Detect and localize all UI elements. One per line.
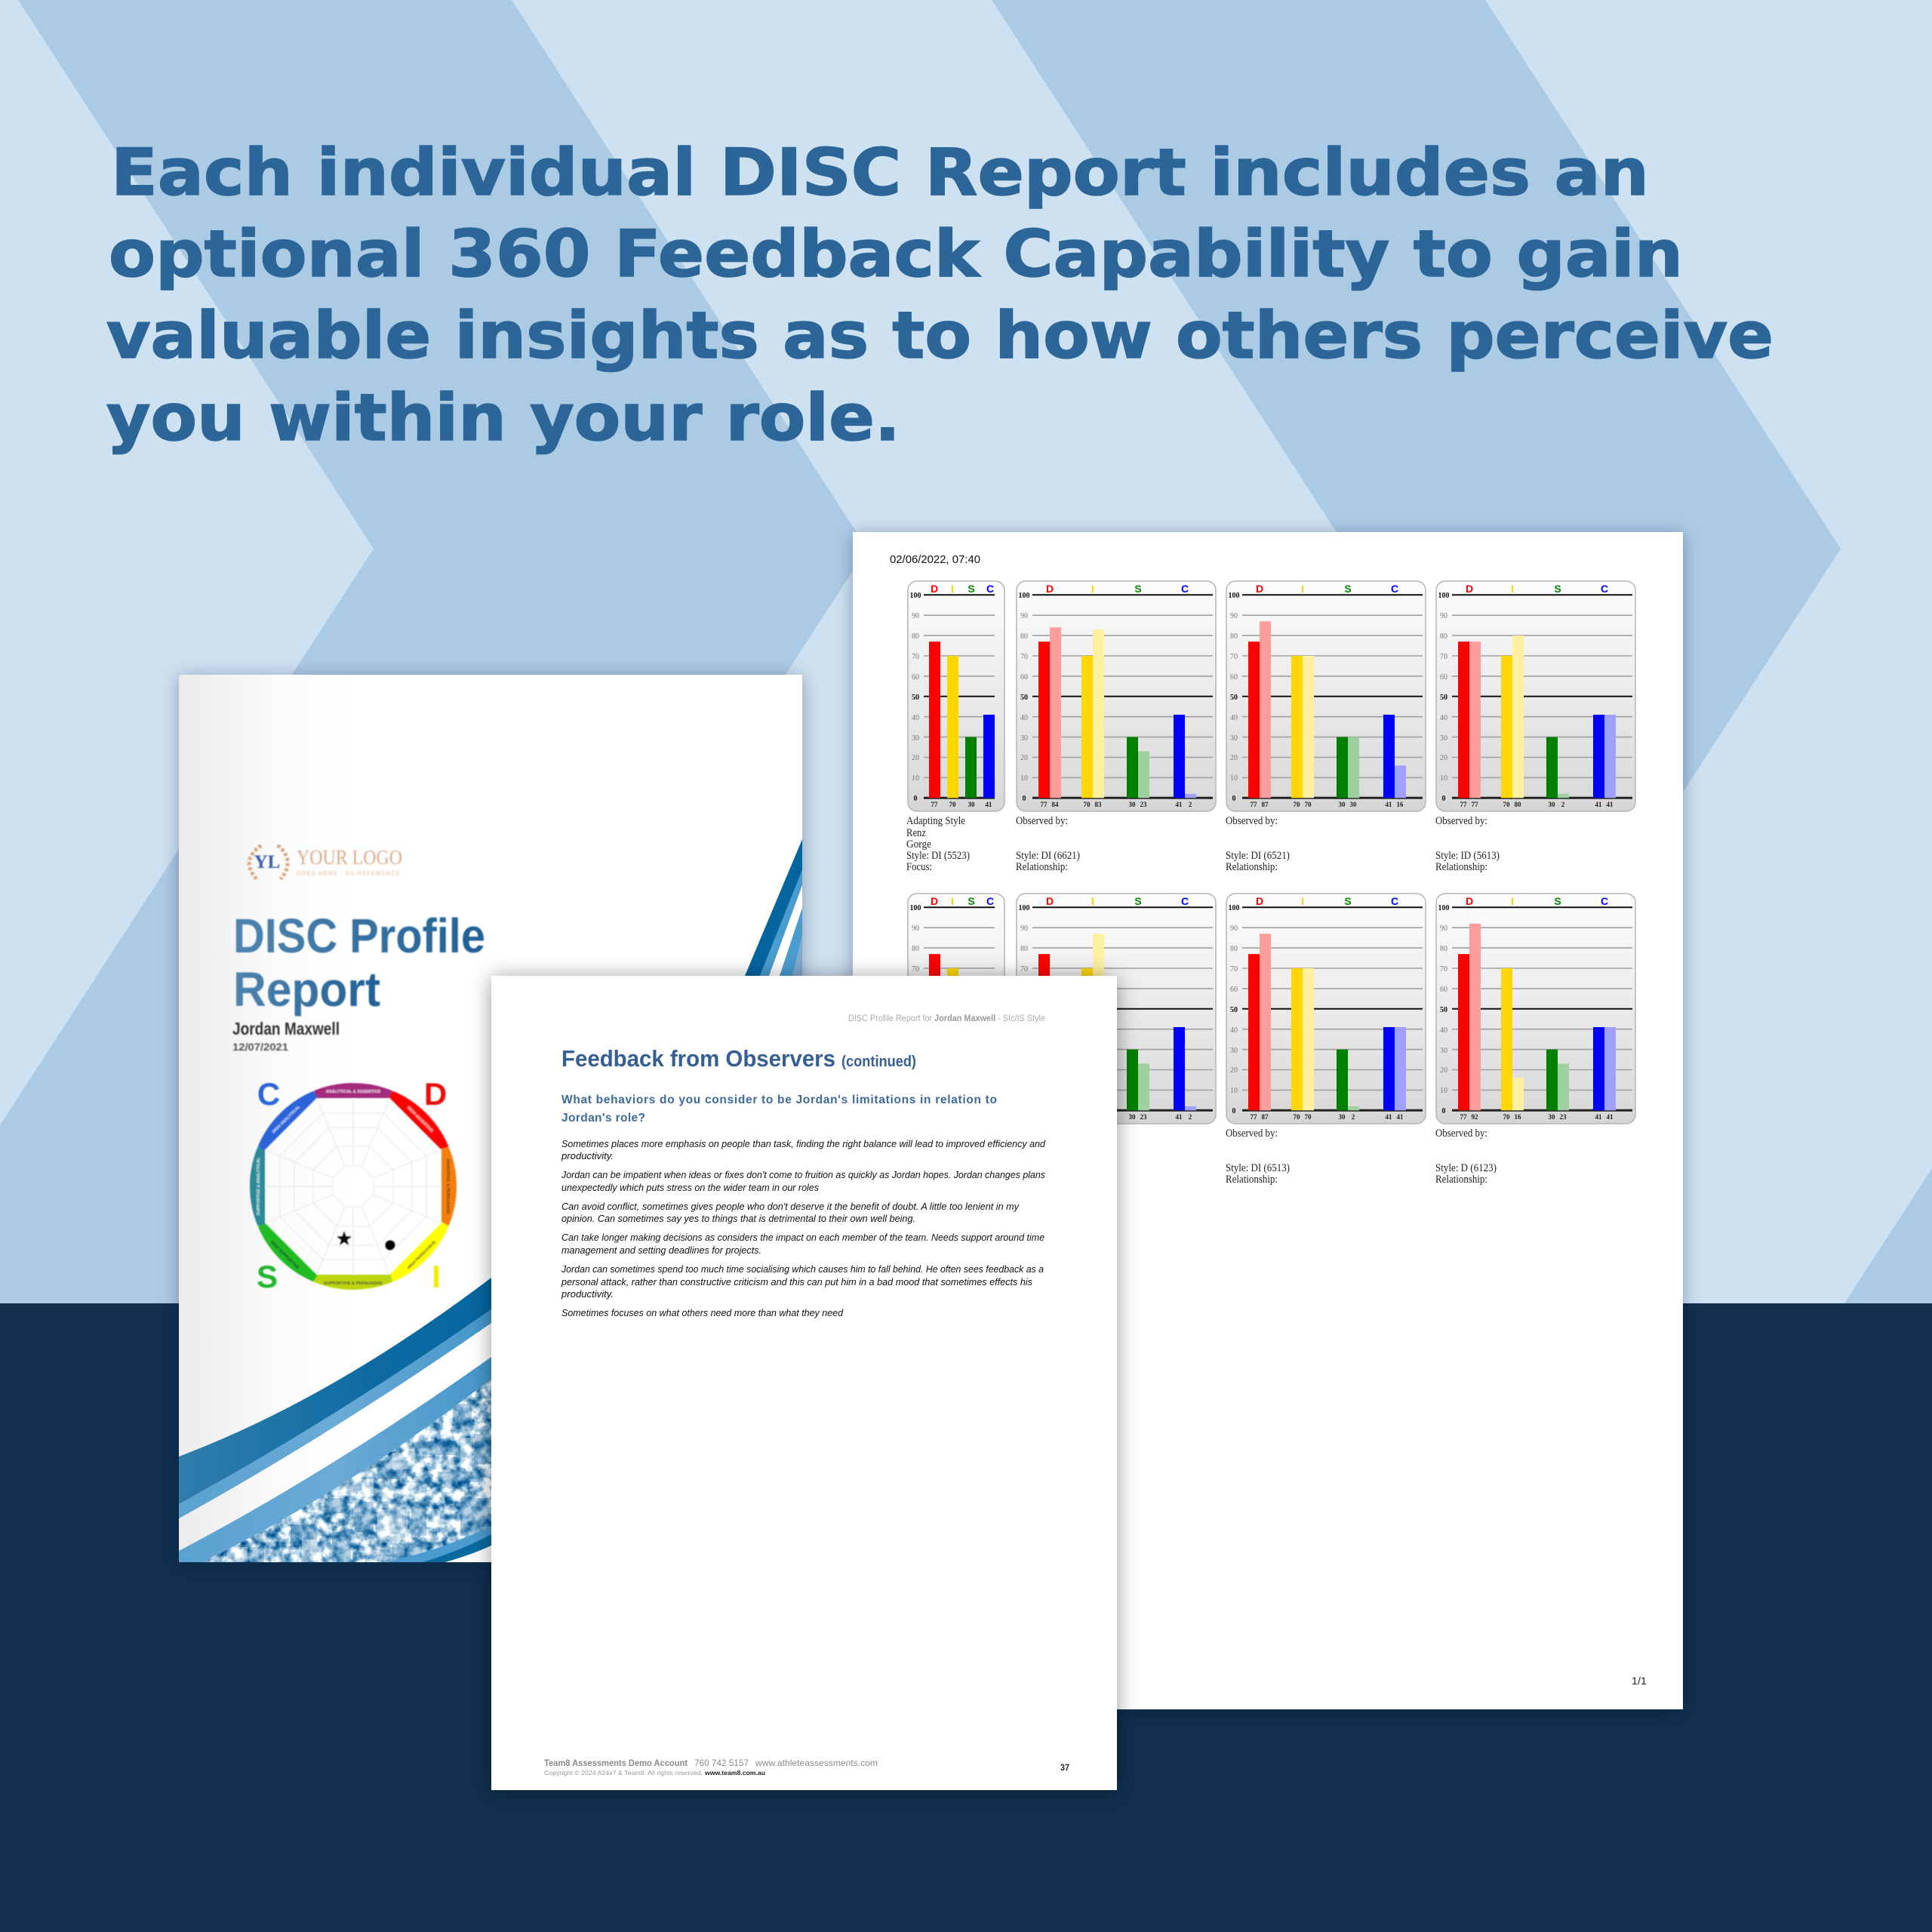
chart captions row 1: Relationship: bbox=[1016, 861, 1068, 873]
chart: observer 3 row 1: 40 bbox=[1440, 714, 1447, 722]
title bbox=[106, 135, 1774, 456]
booklet logo: YOUR LOGO bbox=[297, 846, 402, 869]
chart: observer 2 row 1 bbox=[1226, 581, 1426, 811]
chart: observer 1 row 2: 70 bbox=[1020, 965, 1028, 974]
chart: observer 3 row 2 bbox=[1436, 894, 1635, 1124]
chart: observer 1 row 1: 23 bbox=[1140, 801, 1147, 808]
chart: observer 3 row 2: 50 bbox=[1440, 1006, 1447, 1014]
chart: observer 1 row 1: 83 bbox=[1094, 801, 1102, 808]
chart captions row 1: Observed by: bbox=[1016, 815, 1068, 827]
chart: observer 3 row 1: 70 bbox=[1440, 653, 1447, 661]
chart: observer 2 row 1: 41 bbox=[1386, 801, 1392, 808]
chart: observer 2 row 1: 90 bbox=[1230, 612, 1238, 620]
chart: observer 3 row 2: 70 bbox=[1503, 1113, 1510, 1121]
chart captions row 1: Relationship: bbox=[1226, 861, 1278, 873]
chart: observer 2 row 2: 60 bbox=[1230, 986, 1238, 994]
chart: observer 2 row 2: 100 bbox=[1229, 904, 1239, 912]
chart: observer 3 row 1: 80 bbox=[1514, 801, 1521, 808]
wheel ring labels bbox=[257, 1090, 450, 1286]
chart: observer 1 row 2: 2 bbox=[1189, 1113, 1192, 1121]
chart: adapting style row 1: 0 bbox=[913, 795, 918, 803]
chart: observer 3 row 2: 60 bbox=[1440, 986, 1447, 994]
chart: adapting style row 1: 90 bbox=[912, 612, 919, 620]
chart: adapting style row 1: 20 bbox=[912, 754, 919, 762]
chart: adapting style row 1: 10 bbox=[912, 774, 919, 783]
chart: observer 2 row 2: 50 bbox=[1230, 1006, 1238, 1014]
feedback comments: management and setting deadlines for projects. bbox=[561, 1244, 761, 1256]
chart: adapting style row 1: 70 bbox=[949, 801, 956, 808]
chart: observer 2 row 1: S bbox=[1344, 583, 1352, 595]
chart: observer 3 row 2: D bbox=[1466, 895, 1473, 907]
chart: observer 1 row 1: S bbox=[1134, 583, 1142, 595]
chart captions row 2: Style: D (6123) bbox=[1435, 1162, 1497, 1174]
chart: observer 2 row 2: 41 bbox=[1396, 1113, 1404, 1121]
title: Each individual DISC Report includes an bbox=[111, 135, 1649, 211]
chart: observer 3 row 2: 90 bbox=[1440, 924, 1447, 933]
chart: observer 2 row 2: 20 bbox=[1230, 1066, 1238, 1075]
page footer: www.team8.com.au bbox=[704, 1769, 765, 1777]
chart: observer 3 row 1: S bbox=[1554, 583, 1561, 595]
chart: observer 3 row 2: 0 bbox=[1441, 1107, 1446, 1115]
chart captions row 1: Style: ID (5613) bbox=[1435, 850, 1500, 862]
chart: observer 2 row 1: 16 bbox=[1396, 801, 1404, 808]
wheel ring labels: HIGH SUPPORTIVE bbox=[269, 1240, 300, 1271]
chart: observer 1 row 1: D bbox=[1046, 583, 1054, 595]
chart: observer 2 row 1: 87 bbox=[1262, 801, 1269, 808]
wheel corner letters: D bbox=[424, 1076, 447, 1112]
chart: observer 3 row 1: 2 bbox=[1561, 801, 1565, 808]
chart: observer 1 row 1: 10 bbox=[1020, 774, 1028, 783]
chart: observer 1 row 1: 77 bbox=[1040, 801, 1048, 808]
chart: adapting style row 1 bbox=[908, 581, 1004, 811]
chart: observer 2 row 2: 87 bbox=[1262, 1113, 1269, 1121]
chart: observer 1 row 1: 2 bbox=[1189, 801, 1192, 808]
chart captions row 1: Relationship: bbox=[1435, 861, 1487, 873]
chart: observer 3 row 2: 77 bbox=[1460, 1113, 1467, 1121]
wheel ring labels: HIGH ANALYTICAL bbox=[272, 1104, 302, 1134]
chart: observer 3 row 2: 10 bbox=[1440, 1087, 1447, 1095]
chart: observer 3 row 1: 80 bbox=[1440, 632, 1447, 641]
feedback comments: Sometimes focuses on what others need more than what they need bbox=[561, 1307, 844, 1318]
chart: adapting style row 1: 30 bbox=[912, 734, 919, 743]
chart: adapting style row 2: 70 bbox=[912, 965, 919, 974]
booklet logo: GOES HERE · AS REFERENCE bbox=[296, 870, 401, 877]
chart: observer 1 row 1: 70 bbox=[1020, 653, 1028, 661]
background: navy lower band bbox=[0, 1303, 1932, 1932]
booklet title bbox=[233, 909, 485, 1017]
chart: observer 1 row 1: I bbox=[1091, 583, 1094, 595]
wheel web bbox=[263, 1097, 443, 1276]
feedback comments: unexpectedly which puts stress on the wider team in our roles bbox=[561, 1182, 819, 1193]
chart: observer 3 row 2: 40 bbox=[1440, 1026, 1447, 1035]
chart: observer 3 row 1: 100 bbox=[1438, 592, 1449, 600]
chart: observer 1 row 1: C bbox=[1181, 583, 1189, 595]
chart: observer 3 row 1: 60 bbox=[1440, 673, 1447, 681]
chart: observer 1 row 1: 60 bbox=[1020, 673, 1028, 681]
chart captions row 2 bbox=[1226, 1128, 1497, 1186]
feedback comments: Jordan can be impatient when ideas or fixes don't come to fruition as quickly as Jordan hopes. Jordan changes plans bbox=[561, 1169, 1045, 1180]
chart captions row 1: Style: DI (6521) bbox=[1226, 850, 1290, 862]
chart: observer 2 row 1: 10 bbox=[1230, 774, 1238, 783]
chart captions row 1: Style: DI (6621) bbox=[1016, 850, 1080, 862]
wheel markers: star and dot bbox=[335, 1228, 395, 1251]
booklet title: Report bbox=[233, 962, 380, 1017]
chart: observer 1 row 2: S bbox=[1134, 895, 1142, 907]
chart: observer 3 row 2: 41 bbox=[1595, 1113, 1602, 1121]
chart: observer 3 row 2: 20 bbox=[1440, 1066, 1447, 1075]
chart: observer 2 row 1: 20 bbox=[1230, 754, 1238, 762]
chart: observer 1 row 1: 90 bbox=[1020, 612, 1028, 620]
chart: adapting style row 1: 80 bbox=[912, 632, 919, 641]
booklet name and date bbox=[232, 1019, 340, 1053]
wheel markers: star and dot: ★ bbox=[335, 1228, 353, 1251]
chart: observer 2 row 2: S bbox=[1344, 895, 1352, 907]
feedback comments: personal attack, rather than constructive criticism and this can put him in a bad mood that sometimes effects his bbox=[561, 1276, 1032, 1287]
chart: observer 3 row 1: I bbox=[1511, 583, 1514, 595]
chart: adapting style row 1: I bbox=[951, 583, 954, 595]
chart captions row 1: Adapting Style bbox=[906, 815, 965, 827]
chart: observer 2 row 1: 70 bbox=[1304, 801, 1312, 808]
page footer: 760 742 5157 bbox=[694, 1758, 749, 1768]
chart: observer 2 row 1: 50 bbox=[1230, 694, 1238, 702]
question heading bbox=[561, 1094, 997, 1124]
chart: adapting style row 2: 80 bbox=[912, 945, 919, 953]
chart: observer 2 row 2: I bbox=[1301, 895, 1304, 907]
chart: observer 1 row 1 bbox=[1017, 581, 1216, 811]
chart: observer 2 row 1: 30 bbox=[1339, 801, 1346, 808]
chart: observer 2 row 2: D bbox=[1256, 895, 1263, 907]
chart: observer 1 row 2: 90 bbox=[1020, 924, 1028, 933]
feedback comments: Jordan can sometimes spend too much time socialising which causes him to fall behind. He often sees feedback as a bbox=[561, 1263, 1044, 1275]
chart: observer 2 row 2: 10 bbox=[1230, 1087, 1238, 1095]
wheel ring labels: ASSERTIVE & PERSUASIVE bbox=[445, 1158, 450, 1214]
chart: observer 2 row 2: 40 bbox=[1230, 1026, 1238, 1035]
chart: observer 1 row 1: 20 bbox=[1020, 754, 1028, 762]
chart: observer 3 row 1: D bbox=[1466, 583, 1473, 595]
chart: observer 2 row 2: 0 bbox=[1232, 1107, 1236, 1115]
wheel ring labels: HIGH ASSERTIVE bbox=[406, 1106, 434, 1134]
panel: observer bar charts report page bbox=[853, 532, 1683, 1709]
chart: observer 1 row 2: D bbox=[1046, 895, 1054, 907]
chart: observer 1 row 2 bbox=[1017, 894, 1216, 1124]
chart: adapting style row 1: D bbox=[931, 583, 938, 595]
chart: adapting style row 1: 30 bbox=[968, 801, 975, 808]
chart: observer 2 row 1: C bbox=[1391, 583, 1398, 595]
feedback comments: productivity. bbox=[561, 1288, 614, 1300]
chart: observer 2 row 1: 100 bbox=[1229, 592, 1239, 600]
booklet swoosh: top right bbox=[745, 839, 802, 976]
chart: observer 3 row 1: 30 bbox=[1549, 801, 1555, 808]
chart: observer 3 row 1: 41 bbox=[1595, 801, 1602, 808]
feedback comments: Can avoid conflict, sometimes gives people who don't deserve it the benefit of doubt. A little too lenient in my bbox=[561, 1201, 1020, 1212]
chart: observer 3 row 1: 50 bbox=[1440, 694, 1447, 702]
chart: observer 1 row 1: 40 bbox=[1020, 714, 1028, 722]
feedback comments: productivity. bbox=[561, 1150, 614, 1161]
chart: observer 3 row 2: 70 bbox=[1440, 965, 1447, 974]
page running header: DISC Profile Report for Jordan Maxwell - SIc/IS Style bbox=[848, 1013, 1045, 1023]
chart: adapting style row 2: 100 bbox=[910, 904, 921, 912]
chart captions row 1: Observed by: bbox=[1226, 815, 1278, 827]
chart captions row 2: Relationship: bbox=[1226, 1174, 1278, 1186]
chart: observer 1 row 1: 0 bbox=[1022, 795, 1026, 803]
chart: observer 3 row 2: 92 bbox=[1472, 1113, 1478, 1121]
chart: observer 1 row 2: 100 bbox=[1019, 904, 1029, 912]
panel: DISC profile report booklet cover bbox=[179, 675, 802, 1562]
chart: observer 2 row 1: 77 bbox=[1250, 801, 1257, 808]
chart: observer 3 row 2: 80 bbox=[1440, 945, 1447, 953]
chart: observer 3 row 2: 30 bbox=[1440, 1047, 1447, 1055]
chart: observer 3 row 1: 20 bbox=[1440, 754, 1447, 762]
chart: observer 1 row 1: 50 bbox=[1020, 694, 1028, 702]
wheel ring labels: SUPPORTIVE & ANALYTICAL bbox=[257, 1157, 261, 1215]
chart: observer 2 row 2: 41 bbox=[1386, 1113, 1392, 1121]
chart: observer 2 row 1: 30 bbox=[1230, 734, 1238, 743]
chart: observer 1 row 1: 41 bbox=[1176, 801, 1183, 808]
page heading: Feedback from Observers bbox=[561, 1045, 835, 1072]
chart: observer 3 row 2: S bbox=[1554, 895, 1561, 907]
chart: observer 1 row 2: C bbox=[1181, 895, 1189, 907]
booklet name and date: 12/07/2021 bbox=[232, 1041, 288, 1053]
booklet swoosh: bottom bands and photo mosaic bbox=[179, 1278, 491, 1562]
chart captions row 1: Focus: bbox=[906, 861, 932, 873]
title: you within your role. bbox=[106, 380, 900, 456]
chart: observer 1 row 2: 30 bbox=[1129, 1113, 1136, 1121]
page footer bbox=[544, 1758, 1069, 1777]
chart captions row 2: Style: DI (6513) bbox=[1226, 1162, 1290, 1174]
chart: observer 2 row 1: D bbox=[1256, 583, 1263, 595]
chart: observer 2 row 1: I bbox=[1301, 583, 1304, 595]
chart: adapting style row 2: 90 bbox=[912, 924, 919, 933]
report date: 02/06/2022, 07:40 bbox=[890, 553, 980, 566]
chart: adapting style row 1: S bbox=[968, 583, 975, 595]
booklet title: DISC Profile bbox=[233, 909, 485, 963]
chart: adapting style row 1: C bbox=[986, 583, 994, 595]
feedback comments: opinion. Can sometimes say yes to things that is detrimental to their own well being. bbox=[561, 1213, 915, 1224]
chart: observer 2 row 1: 70 bbox=[1230, 653, 1238, 661]
chart: observer 2 row 1: 70 bbox=[1294, 801, 1300, 808]
wheel ring labels: ANALYTICAL & ASSERTIVE bbox=[326, 1090, 381, 1094]
chart: observer 3 row 2: 16 bbox=[1514, 1113, 1521, 1121]
chart: observer 2 row 2: 77 bbox=[1250, 1113, 1257, 1121]
chart: observer 1 row 2: 80 bbox=[1020, 945, 1028, 953]
booklet name and date: Jordan Maxwell bbox=[232, 1019, 340, 1038]
page footer: Team8 Assessments Demo Account bbox=[544, 1758, 688, 1768]
chart: observer 3 row 1: 77 bbox=[1460, 801, 1467, 808]
chart: observer 3 row 2: 100 bbox=[1438, 904, 1449, 912]
question heading: Jordan's role? bbox=[561, 1112, 645, 1124]
chart: observer 3 row 2: 30 bbox=[1549, 1113, 1555, 1121]
chart captions row 1: Observed by: bbox=[1435, 815, 1487, 827]
feedback comments: Sometimes places more emphasis on people than task, finding the right balance will lead to improved efficiency and bbox=[561, 1138, 1046, 1149]
chart: adapting style row 1: 70 bbox=[912, 653, 919, 661]
chart: observer 2 row 1: 40 bbox=[1230, 714, 1238, 722]
chart: adapting style row 1: 60 bbox=[912, 673, 919, 681]
chart: observer 1 row 2: I bbox=[1091, 895, 1094, 907]
chart: observer 3 row 1: 41 bbox=[1606, 801, 1614, 808]
chart: observer 2 row 2 bbox=[1226, 894, 1426, 1124]
booklet logo bbox=[249, 845, 402, 879]
chart: observer 1 row 2: 23 bbox=[1140, 1113, 1147, 1121]
wheel ring labels: SUPPORTIVE & PERSUASIVE bbox=[324, 1281, 383, 1286]
chart: observer 3 row 1: 0 bbox=[1441, 795, 1446, 803]
wheel corner letters: C bbox=[257, 1076, 280, 1112]
chart: adapting style row 1: 40 bbox=[912, 714, 919, 722]
feedback comments: Can take longer making decisions as considers the impact on each member of the team. Needs support around time bbox=[561, 1232, 1044, 1243]
chart: observer 2 row 2: 30 bbox=[1230, 1047, 1238, 1055]
page footer: www.athleteassessments.com bbox=[755, 1758, 878, 1768]
chart: observer 2 row 2: 70 bbox=[1294, 1113, 1300, 1121]
chart: observer 3 row 1: 77 bbox=[1472, 801, 1478, 808]
chart: adapting style row 1: 100 bbox=[910, 592, 921, 600]
chart: observer 2 row 2: C bbox=[1391, 895, 1398, 907]
chart: observer 3 row 2: I bbox=[1511, 895, 1514, 907]
chart: adapting style row 2 bbox=[908, 894, 1004, 1124]
chart: observer 2 row 1: 30 bbox=[1349, 801, 1357, 808]
chart: observer 3 row 2: 23 bbox=[1559, 1113, 1567, 1121]
chart: observer 1 row 1: 80 bbox=[1020, 632, 1028, 641]
chart: observer 2 row 2: 30 bbox=[1339, 1113, 1346, 1121]
chart: observer 3 row 2: 41 bbox=[1606, 1113, 1614, 1121]
chart: adapting style row 2: S bbox=[968, 895, 975, 907]
chart: adapting style row 1: 77 bbox=[931, 801, 938, 808]
title: valuable insights as to how others perceive bbox=[106, 298, 1774, 374]
feedback comments bbox=[561, 1138, 1046, 1318]
wheel corner letters: S bbox=[257, 1259, 278, 1294]
chart: adapting style row 2: I bbox=[951, 895, 954, 907]
chart: observer 2 row 2: 90 bbox=[1230, 924, 1238, 933]
chart: observer 3 row 1: 30 bbox=[1440, 734, 1447, 743]
booklet logo: YL bbox=[254, 852, 280, 872]
chart: adapting style row 1: 50 bbox=[912, 694, 919, 702]
chart: observer 3 row 2: C bbox=[1601, 895, 1608, 907]
chart: adapting style row 1: 41 bbox=[986, 801, 992, 808]
title: optional 360 Feedback Capability to gain bbox=[109, 217, 1683, 292]
chart: observer 2 row 2: 2 bbox=[1352, 1113, 1355, 1121]
chart captions row 1: Renz bbox=[906, 827, 926, 839]
chart: observer 3 row 1 bbox=[1436, 581, 1635, 811]
question heading: What behaviors do you consider to be Jordan's limitations in relation to bbox=[561, 1094, 997, 1106]
wheel ring labels: HIGH PERSUASIVE bbox=[407, 1240, 438, 1270]
wheel ring segments bbox=[250, 1083, 457, 1290]
chart: observer 1 row 1: 70 bbox=[1084, 801, 1091, 808]
chart: observer 2 row 1: 60 bbox=[1230, 673, 1238, 681]
wheel corner letters: I bbox=[432, 1259, 441, 1294]
chart captions row 1 bbox=[906, 815, 1500, 873]
chart: observer 2 row 1: 80 bbox=[1230, 632, 1238, 641]
chart: observer 3 row 1: 90 bbox=[1440, 612, 1447, 620]
page footer: 37 bbox=[1060, 1762, 1069, 1773]
chart: observer 3 row 1: 10 bbox=[1440, 774, 1447, 783]
DISC wheel bbox=[250, 1076, 457, 1294]
chart captions row 2: Observed by: bbox=[1226, 1128, 1278, 1140]
chart: adapting style row 2: D bbox=[931, 895, 938, 907]
chart: observer 2 row 2: 70 bbox=[1304, 1113, 1312, 1121]
chart: observer 3 row 1: 70 bbox=[1503, 801, 1510, 808]
chart: observer 1 row 1: 100 bbox=[1019, 592, 1029, 600]
chart: observer 2 row 2: 70 bbox=[1230, 965, 1238, 974]
chart: observer 2 row 1: 0 bbox=[1232, 795, 1236, 803]
chart captions row 2: Observed by: bbox=[1435, 1128, 1487, 1140]
chart: observer 3 row 1: C bbox=[1601, 583, 1608, 595]
chart: observer 1 row 1: 30 bbox=[1129, 801, 1136, 808]
page footer: Copyright © 2024 A24x7 & Team8. All rights reserved. bbox=[544, 1769, 703, 1777]
chart: adapting style row 2: C bbox=[986, 895, 994, 907]
panel: feedback from observers page bbox=[491, 976, 1117, 1790]
chart captions row 2: Relationship: bbox=[1435, 1174, 1487, 1186]
chart captions row 1: Gorge bbox=[906, 838, 931, 851]
chart: observer 1 row 1: 30 bbox=[1020, 734, 1028, 743]
chart captions row 1: Style: DI (5523) bbox=[906, 850, 970, 862]
chart: observer 1 row 1: 84 bbox=[1052, 801, 1059, 808]
report page number: 1/1 bbox=[1632, 1675, 1647, 1687]
page heading: (continued) bbox=[841, 1054, 916, 1070]
chart: observer 1 row 2: 41 bbox=[1176, 1113, 1183, 1121]
chart: observer 2 row 2: 80 bbox=[1230, 945, 1238, 953]
wheel corner letters bbox=[257, 1076, 447, 1294]
